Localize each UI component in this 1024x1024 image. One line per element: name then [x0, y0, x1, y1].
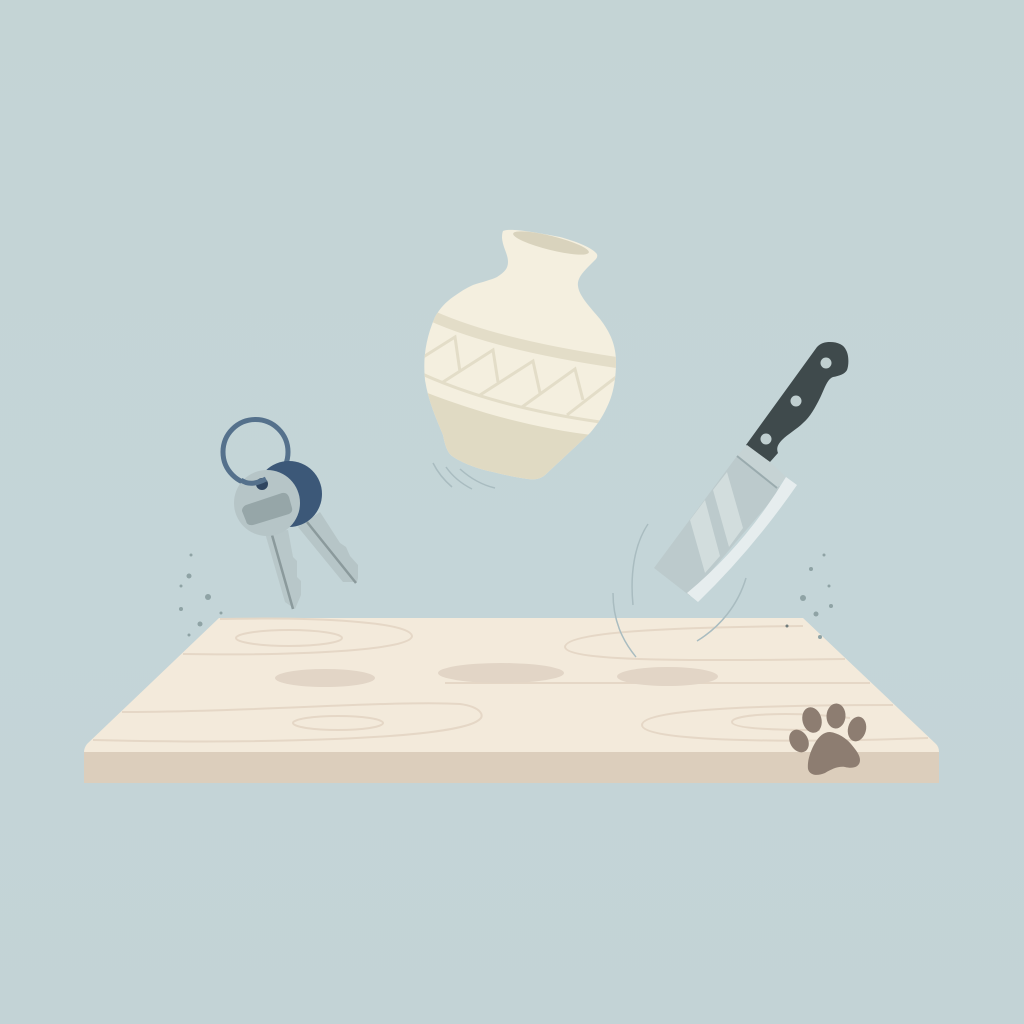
- key hole: [256, 478, 268, 490]
- key ring: [223, 420, 288, 484]
- wooden table: [84, 618, 939, 783]
- front key shaft: [265, 530, 301, 609]
- navy key head: [256, 461, 322, 527]
- vase mouth: [511, 227, 591, 259]
- blade: [654, 456, 782, 596]
- key label: [242, 493, 292, 525]
- blade edge: [687, 477, 797, 602]
- bolster: [737, 445, 786, 488]
- rivets: [820, 358, 832, 368]
- front key groove: [272, 535, 293, 609]
- lower line: [420, 373, 600, 422]
- table front edge: [84, 751, 939, 783]
- icon: vase: [420, 227, 620, 500]
- vase pattern: [424, 312, 616, 480]
- table dents: [275, 669, 375, 687]
- motion arcs: [613, 524, 746, 657]
- zigzag decoration: [420, 337, 620, 415]
- table top: [84, 618, 939, 752]
- back key groove: [307, 522, 356, 583]
- ring loop over key: [241, 479, 266, 483]
- right dust particles: [786, 554, 833, 639]
- icon: paw print: [785, 703, 869, 775]
- left dust particles: [179, 554, 222, 636]
- handle: [746, 342, 848, 462]
- blade stripes: [690, 472, 743, 573]
- motion lines: [433, 463, 495, 489]
- back key: [298, 512, 358, 582]
- vase lower shade: [428, 393, 588, 480]
- icon: keys: [223, 420, 358, 609]
- icon: knife: [613, 342, 848, 657]
- vase body: [424, 230, 616, 479]
- wood grain lines: [93, 619, 928, 741]
- front key head: [234, 470, 300, 536]
- upper band: [432, 316, 620, 363]
- bolster line: [737, 456, 777, 488]
- illustration scene: [84, 230, 939, 783]
